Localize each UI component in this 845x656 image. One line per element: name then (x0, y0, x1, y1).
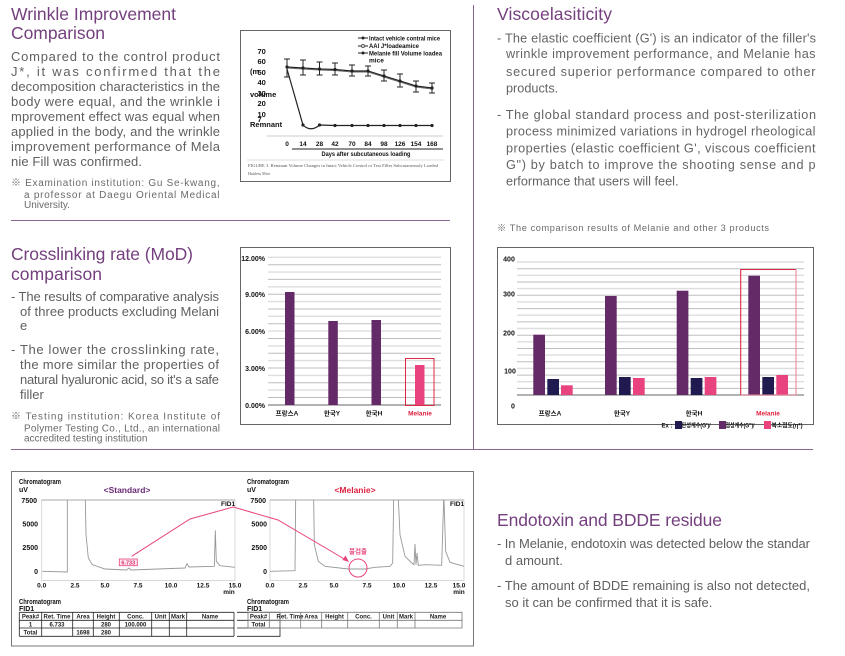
y axis labels (241, 256, 266, 410)
chromatogram: melanie: 5000 (251, 522, 267, 528)
y axis labels: Remnant (250, 120, 283, 129)
x axis labels: 98 (380, 141, 388, 148)
chromatogram: melanie: Chromatogram (247, 479, 289, 486)
table: standard results: 6.733 (49, 622, 65, 628)
y axis labels: 30 (258, 89, 266, 98)
table: melanie results: Total (252, 622, 266, 628)
chart: crosslinking bar chart (240, 248, 450, 424)
text block: crosslinking description: - The results of comparative analysis (11, 289, 220, 304)
x axis labels: 한국H (366, 408, 383, 418)
table: melanie results: Height (325, 614, 344, 620)
x axis labels: Days after subcutaneous loading (322, 151, 411, 158)
heading: endotoxin: Endotoxin and BDDE residue (497, 510, 722, 530)
chromatogram: melanie: 2500 (251, 545, 267, 552)
note: examination institution: ※ Examination institution: Gu Se-kwang, (11, 178, 220, 189)
peak marker (119, 559, 137, 566)
y axis labels (503, 256, 516, 410)
heading: viscoelasticity: Viscoelasiticity (497, 4, 612, 24)
x axis labels: 한국H (686, 408, 703, 418)
not detected marker: 불검출 (349, 546, 367, 556)
x axis labels: 154 (411, 141, 422, 148)
legend: Ex : (661, 424, 673, 430)
chromatogram: standard: 2.5 (70, 582, 80, 590)
chromatogram: standard: 5.0 (100, 582, 110, 590)
chart: viscoelasticity bar chart (498, 248, 814, 430)
table: standard results: FID1 (19, 606, 34, 613)
y axis labels: 7 (258, 115, 262, 124)
chromatogram: melanie: FID1 (450, 501, 464, 508)
note: testing institution: ※ Testing institution: Korea Institute of (11, 412, 220, 422)
table: standard results: 280 (101, 622, 112, 628)
note: testing institution: accredited testing institution (24, 434, 147, 444)
table: standard results: Ret. Time (44, 614, 71, 620)
text block: crosslinking description: filler (20, 387, 45, 402)
legend: Melanie fill Volume loadea (369, 50, 442, 58)
legend: 탄성계수(G')/ (682, 422, 711, 430)
x axis labels: 84 (364, 141, 372, 148)
chart: remnant volume line chart (240, 30, 450, 182)
table: melanie results: Conc. (355, 614, 372, 620)
panel: viscoelasticity text (497, 4, 816, 233)
x axis labels (539, 408, 780, 418)
chromatogram: melanie: <Melanie> (334, 485, 376, 495)
chromatogram: standard: <Standard> (104, 485, 150, 495)
table: melanie results: Name (430, 614, 447, 620)
text block: viscoelasticity description: erformance that users will feel. (506, 174, 678, 188)
chromatogram: melanie: 2.5 (298, 582, 308, 590)
legend (661, 421, 803, 430)
x axis labels: 프랑스A (276, 408, 299, 418)
table: melanie results: Unit (383, 614, 394, 620)
y axis labels (250, 47, 283, 129)
y axis labels: 60 (258, 57, 266, 66)
chromatogram: standard: min (223, 589, 235, 596)
table: standard results: Name (202, 614, 219, 620)
legend: AAl J*loadeamice (369, 43, 419, 50)
x axis labels: Melanie (756, 410, 780, 418)
chromatogram: melanie: uV (247, 487, 256, 494)
chromatogram: standard: FID1 (221, 501, 235, 508)
bars (285, 292, 424, 405)
table: standard results: 280 (101, 630, 112, 636)
y axis labels: 100 (504, 368, 516, 376)
table: standard results: Conc. (127, 614, 144, 620)
table: standard results (19, 599, 234, 636)
chromatogram: melanie: 15.0 (453, 582, 466, 590)
heading: wrinkle improvement (11, 4, 176, 43)
text block: viscoelasticity description: properties (elastic coefficient G', viscous coefficient (506, 142, 816, 156)
y axis labels: 0.00% (245, 403, 266, 410)
heading: wrinkle improvement: Wrinkle Improvement (11, 4, 176, 24)
chromatogram: melanie: 5.0 (329, 582, 339, 590)
chromatogram: melanie: 7.5 (362, 582, 372, 590)
text block: wrinkle description: Compared to the control product (11, 49, 220, 64)
text block: endotoxin description (497, 536, 811, 610)
legend: mice (369, 58, 384, 64)
table: melanie results (237, 599, 462, 636)
y axis labels: 9.00% (245, 292, 266, 299)
text block: viscoelasticity description: process minimized variations in hydrogel rheological (506, 124, 816, 138)
x axis labels: 한국Y (324, 408, 341, 418)
text block: crosslinking description: natural hyaluronic acid, so it's a safe (20, 372, 219, 387)
melanie highlight (406, 358, 434, 406)
text block: viscoelasticity description: products. (506, 82, 558, 96)
x axis labels: 70 (348, 141, 356, 148)
y axis labels: (m (250, 67, 259, 76)
note: testing institution (11, 412, 220, 444)
chromatogram: standard: uV (19, 487, 28, 494)
y axis labels: 6.00% (245, 329, 266, 336)
text block: viscoelasticity description (497, 32, 816, 188)
note: examination institution (11, 178, 220, 211)
peak marker: 6.733 (121, 560, 135, 566)
legend: 복소점도(η*) (772, 422, 803, 430)
text block: crosslinking description: e (20, 318, 27, 333)
text block: crosslinking description: the more similar the properties of (20, 357, 219, 372)
note: comparison results: ※ The comparison results of Melanie and other 3 products (497, 223, 769, 233)
chromatogram: melanie: 0 (263, 569, 267, 576)
text block: wrinkle description: improvement performance of Mela (11, 139, 221, 154)
chromatogram: standard: 12.5 (197, 582, 210, 590)
chromatogram: melanie: 10.0 (393, 582, 406, 590)
table: standard results: 100.000 (125, 622, 147, 628)
text block: crosslinking description: of three products excluding Melani (20, 304, 219, 319)
x axis labels: 0 (285, 141, 289, 148)
chromatogram: standard: 7500 (21, 498, 37, 505)
text block: wrinkle description: body were equal, and the wrinkle i (11, 94, 220, 109)
panel: wrinkle improvement text (11, 4, 221, 211)
table: melanie results: Ret. Time (277, 614, 304, 620)
y axis labels: 10 (258, 110, 266, 119)
table: melanie results: Area (304, 614, 318, 620)
table: standard results: Peak# (22, 614, 40, 620)
x axis labels: 28 (316, 141, 323, 148)
text block: wrinkle description (11, 49, 221, 169)
bars (533, 276, 788, 395)
chromatogram: standard: 0.0 (37, 582, 47, 590)
x axis labels: 168 (427, 141, 438, 148)
x axis labels: 한국Y (614, 408, 631, 418)
data lines (284, 59, 435, 129)
text block: viscoelasticity description: G") by batch to improve the shooting sense and p (506, 158, 816, 172)
caption: FIGURE 3. Remnant Volume Changes in Intact Vehicle Control or Test Filler Subcutaneously Loaded (248, 163, 438, 168)
heading: crosslinking rate (11, 244, 193, 284)
panel: chromatogram comparison (12, 472, 474, 646)
text block: wrinkle description: nie Fill was confirmed. (11, 154, 142, 169)
legend (358, 36, 442, 64)
text block: viscoelasticity description: wrinkle improvement performance, and Melanie has (505, 47, 816, 61)
text block: endotoxin description: d amount. (505, 553, 563, 568)
y axis labels: 200 (503, 330, 515, 338)
panel: crosslinking rate text (11, 244, 220, 444)
note: testing institution: Polymer Testing Co., Ltd., an international (24, 424, 220, 434)
chromatogram: melanie: 12.5 (425, 582, 438, 590)
note: examination institution: University. (24, 200, 70, 211)
chromatogram: standard: 15.0 (229, 582, 242, 590)
text block: endotoxin description: - In Melanie, endotoxin was detected below the standar (497, 536, 811, 551)
legend: 점성계수(G")/ (726, 422, 755, 430)
table: standard results: Total (24, 630, 38, 636)
x axis labels: 프랑스A (539, 408, 562, 418)
text block: viscoelasticity description: - The global standard process and post-sterilization (497, 108, 816, 122)
chromatogram: standard: 2500 (22, 545, 38, 552)
x axis labels: 14 (299, 141, 307, 148)
chromatogram: melanie: 0.0 (265, 582, 275, 590)
table: standard results: Mark (171, 614, 186, 620)
x axis labels: 42 (331, 141, 339, 148)
caption (248, 163, 438, 176)
text block: wrinkle description: applied in the body, and the wrinkle (11, 124, 220, 139)
text block: wrinkle description: J*, it was confirmed that the (11, 64, 220, 79)
y axis labels: 400 (503, 256, 515, 264)
chromatogram: melanie (247, 479, 466, 596)
text block: wrinkle description: decomposition characteristics in the (11, 79, 220, 94)
y axis labels: 50 (258, 68, 266, 77)
x axis labels (276, 408, 432, 418)
chromatogram: standard: 0 (34, 569, 38, 576)
panel: endotoxin and BDDE residue (497, 510, 811, 610)
x axis labels: 126 (395, 141, 406, 148)
text block: crosslinking description (11, 289, 220, 402)
table: melanie results: Chromatogram (247, 599, 289, 606)
text block: viscoelasticity description: - The elastic coefficient (G') is an indicator of the filler's (497, 32, 816, 46)
y axis labels: 20 (258, 99, 266, 108)
arrow: standard peak to melanie (132, 507, 349, 562)
melanie highlight (741, 270, 796, 395)
y axis labels: volume (250, 90, 276, 99)
chromatogram: melanie: min (453, 589, 465, 596)
text block: viscoelasticity description: secured superior performance compared to other (506, 65, 816, 79)
table: melanie results: Mark (399, 614, 414, 620)
chromatogram: standard: 5000 (22, 522, 38, 528)
y axis labels: 300 (503, 292, 515, 298)
chromatogram: standard: 7.5 (133, 582, 143, 590)
y axis labels: 0 (511, 404, 515, 410)
not detected marker (349, 546, 367, 577)
x axis labels (285, 141, 438, 158)
heading: crosslinking rate: comparison (11, 264, 102, 284)
text block: crosslinking description: - The lower the crosslinking rate, (11, 342, 219, 357)
caption: Hairless Mice (248, 171, 271, 176)
text block: endotoxin description: so it can be confirmed that it is safe. (505, 595, 712, 610)
table: melanie results: Peak# (250, 614, 268, 620)
y axis labels: 40 (258, 78, 266, 87)
chromatogram: standard (19, 479, 242, 596)
legend: Intact vehicle contral mice (369, 36, 440, 42)
heading: wrinkle improvement: Comparison (11, 23, 105, 43)
table: standard results: Area (76, 614, 90, 620)
chromatogram: melanie: 7500 (250, 498, 266, 505)
text block: endotoxin description: - The amount of BDDE remaining is also not detected, (497, 578, 810, 593)
table: standard results: Unit (155, 614, 166, 620)
table: standard results: 1698 (76, 630, 90, 636)
chromatogram: standard: 10.0 (165, 582, 178, 590)
y axis labels: 3.00% (245, 366, 266, 373)
y axis labels: 12.00% (241, 256, 266, 263)
table: standard results: Chromatogram (19, 599, 61, 606)
table: standard results: 1 (29, 622, 33, 628)
table: melanie results: FID1 (247, 606, 262, 613)
chromatogram: standard: Chromatogram (19, 479, 61, 486)
x axis labels: Melanie (408, 410, 432, 418)
table: standard results: Height (97, 614, 115, 620)
heading: crosslinking rate: Crosslinking rate (MoD) (11, 244, 193, 264)
note: examination institution: a professor at Daegu Oriental Medical (24, 190, 219, 201)
text block: wrinkle description: mprovement effect was equal when (11, 109, 220, 124)
y axis labels: 70 (258, 47, 266, 56)
